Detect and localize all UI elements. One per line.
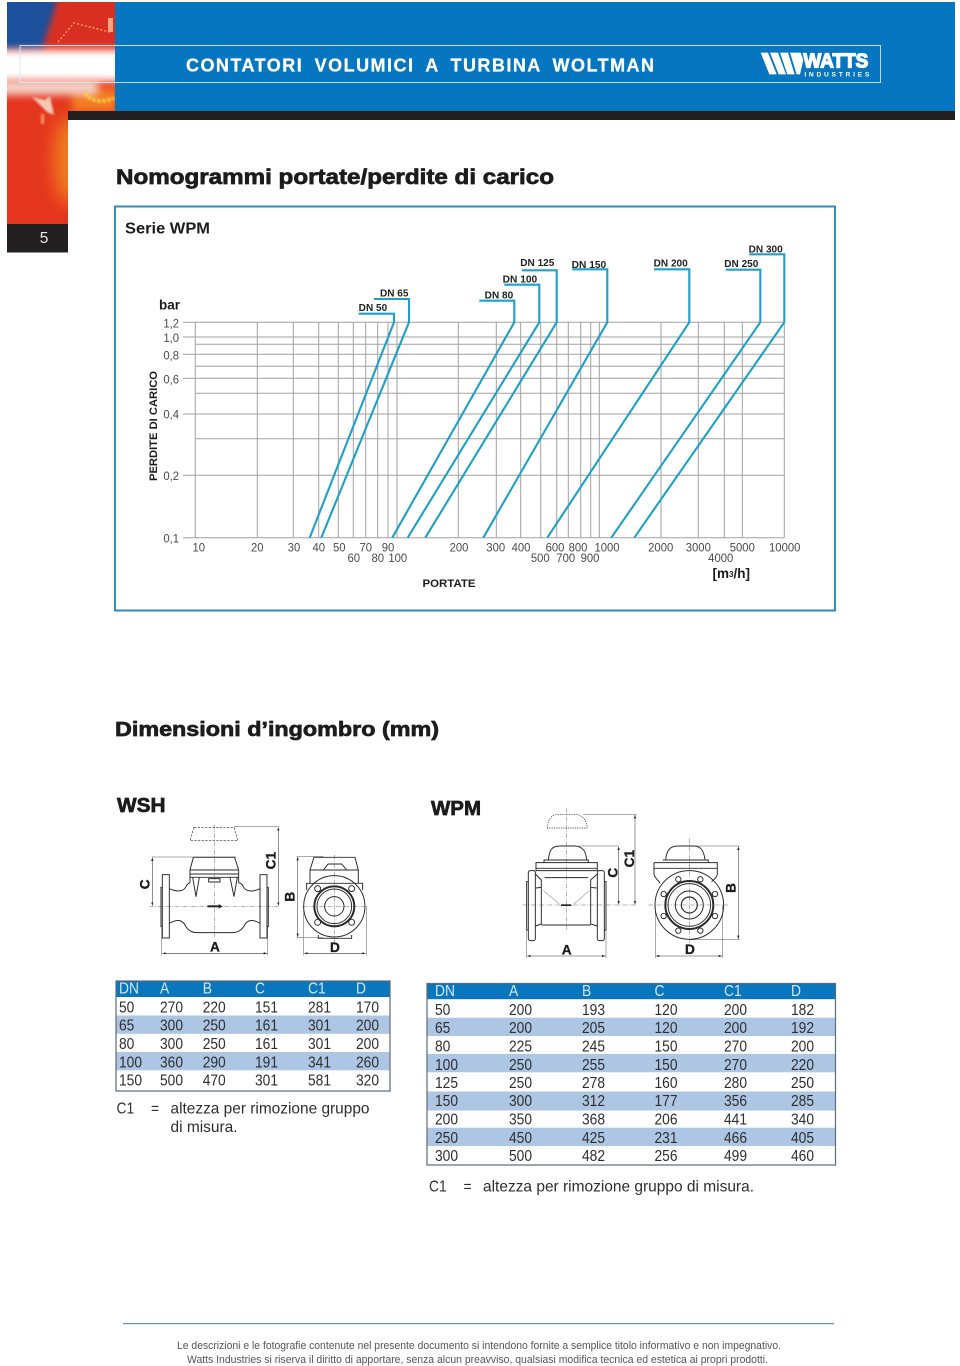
x axis labels: 80 <box>371 552 384 565</box>
row DN 80: 150 <box>655 1039 678 1056</box>
row DN 65 <box>119 1018 379 1035</box>
row DN 200: 350 <box>509 1112 532 1129</box>
flow curves <box>310 254 784 538</box>
x axis title: PORTATE <box>422 578 476 590</box>
diagram: WPM meter: B <box>723 883 738 893</box>
note: WPM C1: C1 <box>429 1179 447 1196</box>
row DN 50: 182 <box>791 1002 814 1019</box>
row DN 150: 300 <box>509 1093 532 1110</box>
footer disclaimer: Watts Industries si riserva il diritto di apportare, senza alcun preavviso, qualsiasi modifica tecnica ed estetica ai propri prodotti. <box>187 1354 768 1366</box>
row DN 250: 231 <box>655 1130 678 1147</box>
row DN 65 <box>435 1020 814 1037</box>
row DN 65: 65 <box>435 1020 450 1037</box>
y axis labels: 1,0 <box>163 331 180 345</box>
table header: WSH: B <box>203 981 212 998</box>
DN curve labels: DN 300 <box>749 244 783 255</box>
row DN 150: 285 <box>791 1093 814 1110</box>
table header: WPM <box>435 983 801 1000</box>
row DN 100 <box>119 1055 379 1072</box>
row DN 65: 200 <box>509 1020 532 1037</box>
row DN 80: 200 <box>356 1036 379 1053</box>
row DN 100: 255 <box>582 1057 605 1074</box>
table header: WPM: B <box>582 983 591 1000</box>
row DN 200: 441 <box>724 1112 747 1129</box>
row DN 125: 250 <box>791 1075 814 1092</box>
row DN 100: 270 <box>724 1057 747 1074</box>
heading: WSH: WSH <box>117 795 166 817</box>
y axis labels: 0,2 <box>163 470 179 483</box>
row DN 150: 356 <box>724 1093 747 1110</box>
decorative flame artwork <box>7 2 115 224</box>
heading: dimensioni: Dimensioni d’ingombro (mm) <box>115 718 439 741</box>
x axis labels: 70 <box>359 541 372 554</box>
note: WPM C1: = <box>463 1179 472 1196</box>
row DN 125 <box>435 1075 814 1092</box>
row DN 50: 151 <box>255 1000 278 1017</box>
diagram: WSH meter <box>138 825 367 955</box>
table header: WSH: D <box>356 981 366 998</box>
row DN 125: 278 <box>582 1075 605 1092</box>
row DN 125: 125 <box>435 1075 458 1092</box>
row DN 65: 192 <box>791 1020 814 1037</box>
y axis title: PERDITE DI CARICO <box>148 371 160 481</box>
row DN 200: 206 <box>655 1112 678 1129</box>
row DN 50: 50 <box>435 1002 450 1019</box>
footer disclaimer: Le descrizioni e le fotografie contenute nel presente documento si intendono fornite a semplice titolo informativo e non impegnativo. <box>177 1340 781 1352</box>
row DN 300: 256 <box>655 1148 678 1165</box>
row DN 100: 360 <box>160 1055 183 1072</box>
row DN 150: 312 <box>582 1093 605 1110</box>
note: WSH C1 <box>116 1100 370 1136</box>
row DN 125: 160 <box>655 1075 678 1092</box>
row DN 125: 280 <box>724 1075 747 1092</box>
x axis labels: 3000 <box>686 541 711 554</box>
row DN 80: 300 <box>160 1036 183 1053</box>
row DN 100: 100 <box>435 1057 458 1074</box>
table header: WSH: A <box>160 981 169 998</box>
header frame line <box>20 46 880 82</box>
row DN 65: 300 <box>160 1018 183 1035</box>
row DN 300: 500 <box>509 1148 532 1165</box>
table: WSH dimensions <box>116 981 390 1091</box>
row DN 250: 425 <box>582 1130 605 1147</box>
diagram: WSH meter: C <box>138 879 153 889</box>
row DN 65: 205 <box>582 1020 605 1037</box>
row DN 65: 120 <box>655 1020 678 1037</box>
row DN 300: 499 <box>724 1148 747 1165</box>
heading: nomogrammi: Nomogrammi portate/perdite di carico <box>116 166 554 189</box>
row DN 150: 177 <box>655 1093 678 1110</box>
note: WPM C1: altezza per rimozione gruppo di misura. <box>483 1178 754 1196</box>
heading: WPM: WPM <box>431 798 481 820</box>
table header: WPM: C1 <box>724 983 742 1000</box>
DN curve labels: DN 65 <box>380 288 409 300</box>
logo: Watts Industries: WATTS <box>803 50 868 72</box>
y axis labels: 0,1 <box>163 532 179 545</box>
row DN 80 <box>435 1039 814 1056</box>
x axis labels: 500 <box>531 552 550 565</box>
diagram: WPM meter: C1 <box>622 850 637 867</box>
y axis labels <box>163 317 180 545</box>
x axis labels: 1000 <box>594 541 620 554</box>
DN curve labels <box>359 244 783 314</box>
diagram: WPM meter: A <box>562 943 572 958</box>
row DN 300: 460 <box>791 1148 814 1165</box>
diagram: WSH meter: B <box>282 892 297 902</box>
DN curve labels: DN 80 <box>485 291 514 302</box>
row DN 150: 500 <box>160 1073 183 1090</box>
row DN 150 <box>119 1073 379 1090</box>
row DN 80: 200 <box>791 1039 814 1056</box>
table header: WPM: A <box>509 983 518 1000</box>
row DN 50: 200 <box>509 1002 532 1019</box>
row DN 250: 250 <box>435 1130 458 1147</box>
row DN 80: 80 <box>119 1036 134 1053</box>
footer disclaimer <box>177 1340 781 1366</box>
y axis labels: 0,4 <box>163 408 180 421</box>
row DN 150: 581 <box>308 1073 331 1090</box>
row DN 125: 250 <box>509 1075 532 1092</box>
x axis labels: 900 <box>581 552 600 565</box>
row DN 100: 260 <box>356 1055 379 1072</box>
x axis labels: 300 <box>486 541 506 554</box>
row DN 65: 161 <box>255 1018 278 1035</box>
row DN 150 <box>435 1093 814 1110</box>
row DN 80: 270 <box>724 1039 747 1056</box>
table header: WSH: C <box>255 981 265 998</box>
x axis labels: 100 <box>388 552 408 565</box>
x axis labels: 50 <box>333 541 346 554</box>
diagram: WSH meter: D <box>330 940 340 955</box>
diagram: WSH meter: A <box>210 939 220 954</box>
x axis labels: 2000 <box>648 541 674 554</box>
row DN 50: 120 <box>655 1002 678 1019</box>
row DN 50: 50 <box>119 1000 134 1017</box>
row DN 250 <box>435 1130 814 1147</box>
row DN 200: 340 <box>791 1112 814 1129</box>
row DN 50: 220 <box>203 1000 226 1017</box>
table: WPM dimensions <box>427 983 836 1165</box>
DN curve labels: DN 50 <box>359 303 388 314</box>
row DN 50: 170 <box>356 1000 379 1017</box>
row DN 50: 281 <box>308 1000 331 1017</box>
footer rule <box>123 1323 834 1324</box>
DN curve labels: DN 100 <box>503 275 538 286</box>
row DN 100: 100 <box>119 1055 142 1072</box>
x axis labels: 4000 <box>708 552 734 565</box>
row DN 80: 250 <box>203 1036 226 1053</box>
row DN 300: 300 <box>435 1148 458 1165</box>
row DN 300 <box>435 1148 814 1165</box>
row DN 250: 450 <box>509 1130 532 1147</box>
row DN 150: 150 <box>119 1073 142 1090</box>
x axis labels: 800 <box>569 541 588 554</box>
row DN 250: 405 <box>791 1130 814 1147</box>
note: WSH C1: = <box>151 1101 159 1118</box>
page number box <box>7 224 68 252</box>
DN curve labels: DN 250 <box>724 259 759 270</box>
y axis labels: 0,6 <box>163 373 179 386</box>
row DN 100: 250 <box>509 1057 532 1074</box>
y axis unit: bar <box>159 298 181 312</box>
row DN 200 <box>435 1112 814 1129</box>
row DN 250: 466 <box>724 1130 747 1147</box>
row DN 80: 161 <box>255 1036 278 1053</box>
row DN 150: 150 <box>435 1093 458 1110</box>
x axis labels: 20 <box>251 541 264 554</box>
x axis labels: 90 <box>382 541 395 554</box>
row DN 50: 270 <box>160 1000 183 1017</box>
x axis unit: [m <box>712 566 729 581</box>
row DN 65: 250 <box>203 1018 226 1035</box>
row DN 200: 368 <box>582 1112 605 1129</box>
diagram: WPM meter <box>523 808 740 958</box>
row DN 100: 220 <box>791 1057 814 1074</box>
row DN 300: 482 <box>582 1148 605 1165</box>
note: WSH C1: altezza per rimozione gruppo <box>170 1100 370 1118</box>
row DN 65: 200 <box>724 1020 747 1037</box>
row DN 65: 65 <box>119 1018 134 1035</box>
panel: nomogram chart <box>115 206 835 610</box>
row DN 80: 225 <box>509 1039 532 1056</box>
row DN 150: 470 <box>203 1073 226 1090</box>
x axis labels: 40 <box>312 541 325 554</box>
row DN 50: 193 <box>582 1002 605 1019</box>
table header: WSH <box>119 981 366 998</box>
row DN 100 <box>435 1057 814 1074</box>
header band <box>68 2 955 120</box>
x axis labels: 30 <box>288 541 301 554</box>
table header: WSH: C1 <box>308 981 326 998</box>
page number box: 5 <box>40 230 48 247</box>
row DN 100: 191 <box>255 1055 278 1072</box>
x axis unit: 3 <box>729 570 734 579</box>
y axis labels: 0,8 <box>163 349 179 362</box>
row DN 50 <box>119 1000 379 1017</box>
DN curve labels: DN 200 <box>654 259 688 270</box>
series title: Serie WPM <box>125 220 210 238</box>
note: WSH C1: di misura. <box>170 1119 238 1136</box>
diagram: WSH meter: C1 <box>264 852 279 869</box>
row DN 200: 200 <box>435 1112 458 1129</box>
row DN 100: 150 <box>655 1057 678 1074</box>
x axis labels: 200 <box>450 541 469 554</box>
table header: WPM: DN <box>435 983 455 1000</box>
table header: WSH: DN <box>119 981 139 998</box>
x axis labels: 400 <box>512 541 531 554</box>
x axis labels: 600 <box>546 541 565 554</box>
row DN 65: 200 <box>356 1018 379 1035</box>
row DN 150: 320 <box>356 1073 379 1090</box>
row DN 150: 301 <box>255 1073 278 1090</box>
row DN 80: 245 <box>582 1039 605 1056</box>
x axis unit: /h] <box>733 566 750 581</box>
x axis labels <box>192 541 801 565</box>
diagram: WPM meter: C <box>606 868 621 878</box>
header title: CONTATORI VOLUMICI A TURBINA WOLTMAN <box>186 56 654 76</box>
note: WSH C1: C1 <box>116 1101 134 1118</box>
row DN 50: 200 <box>724 1002 747 1019</box>
y axis labels: 1,2 <box>163 317 179 330</box>
table header: WPM: D <box>791 983 801 1000</box>
x axis labels: 10000 <box>769 541 801 554</box>
chart grid <box>183 322 784 538</box>
row DN 65: 301 <box>308 1018 331 1035</box>
logo: Watts Industries: INDUSTRIES <box>804 71 870 78</box>
row DN 80: 301 <box>308 1036 331 1053</box>
row DN 80: 80 <box>435 1039 450 1056</box>
logo: Watts Industries <box>761 50 870 78</box>
row DN 80 <box>119 1036 379 1053</box>
table header: WPM: C <box>655 983 665 1000</box>
diagram: WPM meter: D <box>685 942 695 957</box>
x axis labels: 60 <box>347 552 360 565</box>
row DN 100: 341 <box>308 1055 331 1072</box>
x axis labels: 700 <box>556 552 576 565</box>
x axis labels: 5000 <box>730 541 755 554</box>
DN curve labels: DN 150 <box>572 260 607 271</box>
row DN 50 <box>435 1002 814 1019</box>
row DN 100: 290 <box>203 1055 226 1072</box>
DN curve labels: DN 125 <box>520 258 555 269</box>
x axis labels: 10 <box>192 541 205 554</box>
